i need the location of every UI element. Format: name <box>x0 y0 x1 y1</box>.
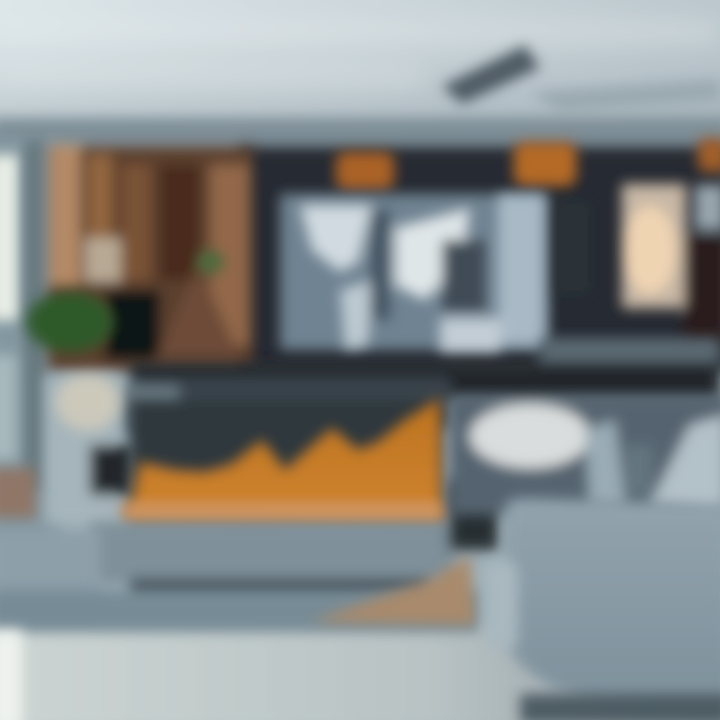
dark side table <box>450 480 498 550</box>
grey sofa <box>90 522 455 602</box>
world map wall art <box>280 194 592 352</box>
rug <box>310 555 475 625</box>
console shelf <box>130 338 720 428</box>
ceiling <box>0 0 720 132</box>
left window and wall <box>0 140 60 540</box>
lower left wall and armchair <box>45 374 180 525</box>
wood panel wall <box>48 145 253 371</box>
pendant lamps <box>336 138 720 190</box>
right wall art <box>622 184 720 345</box>
ceiling vent <box>442 45 720 112</box>
ceiling edge band <box>0 118 720 150</box>
floor <box>0 530 720 720</box>
dark back wall <box>240 146 720 371</box>
orange area chart artwork <box>122 398 444 525</box>
plant <box>26 250 224 352</box>
right sofa cushions <box>450 395 720 515</box>
right sofa <box>484 498 720 720</box>
